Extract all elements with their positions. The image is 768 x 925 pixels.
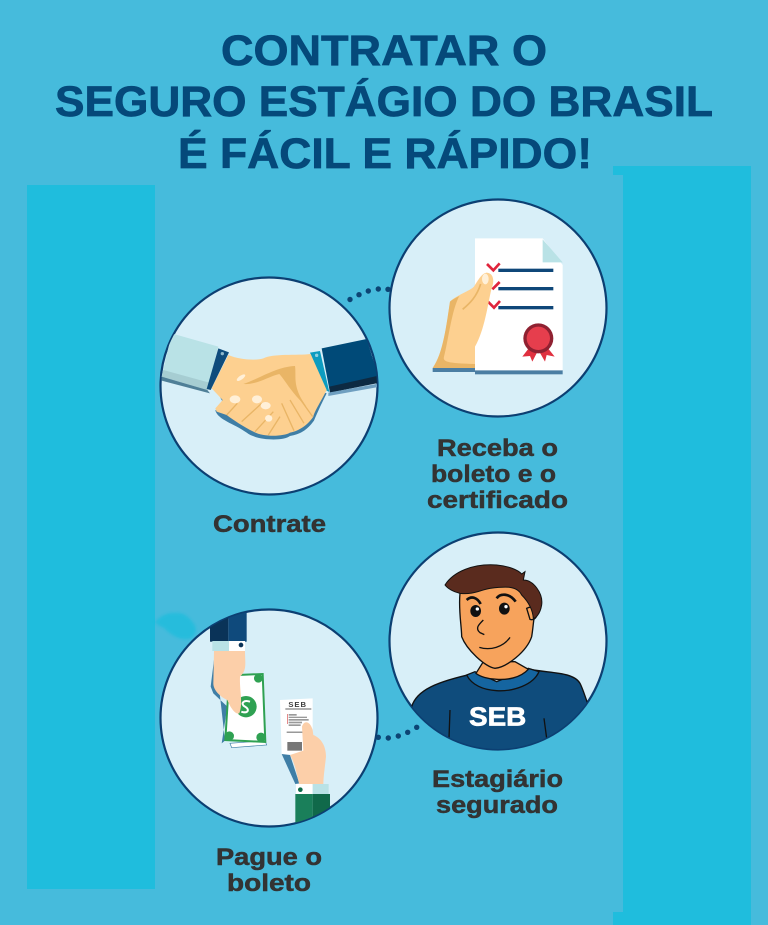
icon: certificate and hand (433, 238, 563, 374)
label: pague o boleto: Pague o (216, 844, 322, 871)
label: receba o boleto: Receba o (437, 435, 558, 462)
icon: hands with money and bill: SEB (288, 700, 307, 709)
icon: insured intern: SEB (469, 702, 526, 732)
label: receba o boleto (427, 435, 568, 514)
decorative cloud smudge (155, 613, 196, 639)
title (55, 28, 713, 178)
right side panel (613, 166, 751, 925)
panel: pague circle (160, 610, 378, 827)
icon: handshake (162, 333, 380, 439)
label: contrate: Contrate (213, 511, 326, 538)
label: receba o boleto: boleto e o (431, 461, 556, 488)
label: receba o boleto: certificado (427, 487, 568, 514)
icon: insured intern (412, 565, 588, 757)
title: SEGURO ESTÁGIO DO BRASIL (55, 78, 713, 126)
left side panel (27, 185, 155, 889)
label: pague o boleto: boleto (227, 870, 311, 897)
title: É FÁCIL E RÁPIDO! (178, 130, 592, 178)
panel: receba circle (390, 200, 606, 416)
title: CONTRATAR O (221, 28, 547, 75)
connector dots: top (347, 286, 391, 302)
panel: estagiario circle (390, 532, 606, 757)
label: estagiario segurado (432, 766, 563, 819)
connector dots: bottom (376, 725, 419, 741)
icon: hands with money and bill (210, 612, 330, 827)
label: estagiario segurado: segurado (436, 792, 558, 819)
label: pague o boleto (216, 844, 322, 897)
label: estagiario segurado: Estagiário (432, 766, 563, 793)
panel: contrate circle (160, 278, 380, 494)
